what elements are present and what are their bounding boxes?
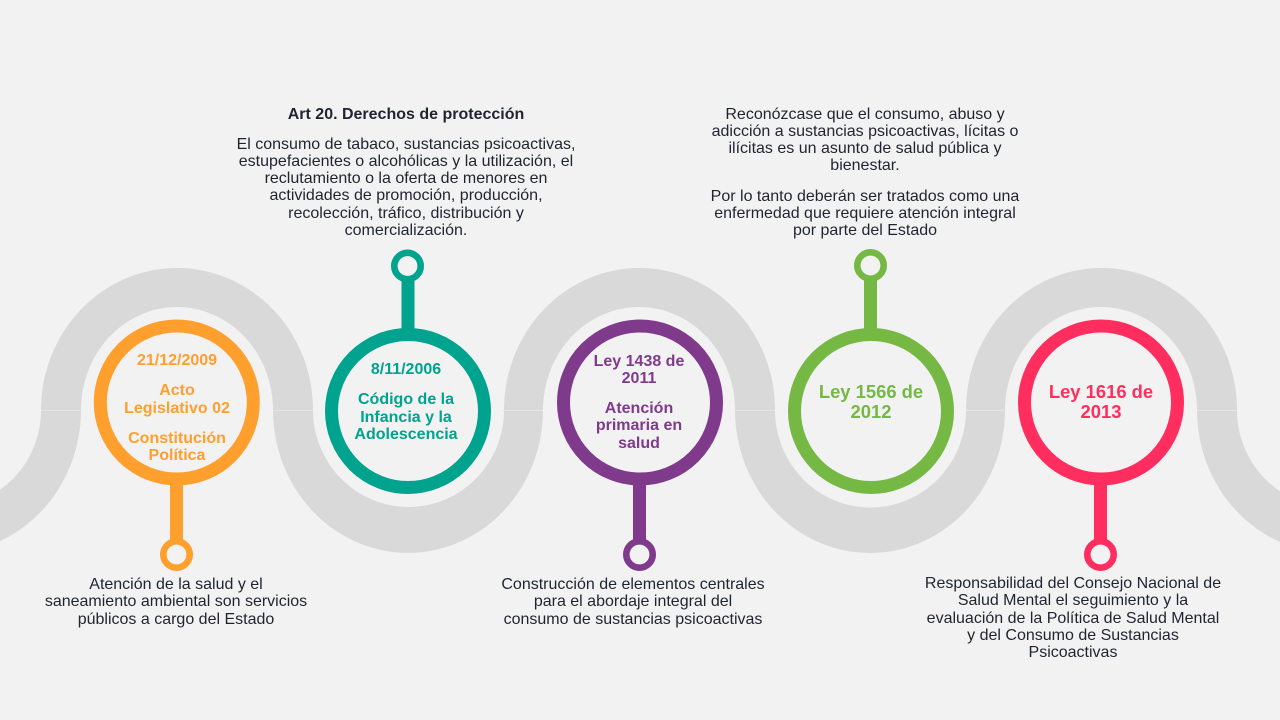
marker: pink circle with stem and ring [1024,326,1178,568]
label: Ley 1438 de 2011: salud [618,435,660,452]
text: Art 20 description: reclutamiento o la oferta de menores en [265,170,547,187]
marker: green circle with stem and ring [794,252,948,488]
text: Ley 1566 description: adicción a sustancias psicoactivas, lícitas o [712,123,1018,140]
text: Ley 1616 description: Salud Mental el seguimiento y la [958,592,1188,609]
text: Ley 1616 description: y del Consumo de Sustancias [967,627,1179,644]
label: Ley 1616 de 2013 [1049,381,1153,422]
text: Ley 1438 description: Construcción de elementos centrales [501,576,765,593]
label: Código de la Infancia: Infancia y la [360,409,452,426]
text: Ley 1438 description [501,576,765,628]
label: Ley 1438 de 2011: 2011 Atención [605,370,673,417]
text: Art 20 description [237,136,575,239]
text: Acto Legislativo description: saneamiento ambiental son servicios [45,593,307,610]
label: Ley 1438 de 2011: primaria en [596,417,682,434]
marker: purple circle with stem and ring [564,326,716,568]
text: Art 20 description: El consumo de tabaco, sustancias psicoactivas, [237,136,575,152]
text: Acto Legislativo description: públicos a cargo del Estado [78,611,274,628]
text: Art 20 description: recolección, tráfico, distribución y [288,205,524,222]
text: Ley 1566 description: ilícitas es un asunto de salud pública y [728,140,1002,157]
marker: orange circle with stem and ring [100,326,253,568]
label: Ley 1438 de 2011 [594,352,684,452]
label: Ley 1616 de 2013: 2013 [1081,401,1121,422]
label: Acto Legislativo 02: Legislativo 02 Constitución [124,400,230,447]
text: Ley 1616 description: Psicoactivas [1029,644,1117,661]
text: Art 20 description: estupefacientes o alcohólicas y la utilización, el [239,153,573,170]
label: Ley 1566 de 2012: 2012 [851,401,891,422]
text: Ley 1616 description: Responsabilidad del Consejo Nacional de [925,575,1221,592]
text: Art 20 description: actividades de promoción, producción, [269,187,543,204]
text: Ley 1438 description: para el abordaje integral del [534,593,732,610]
text: Ley 1566 description: bienestar. Por lo tanto deberán ser tratados como una [711,157,1019,205]
text: Ley 1566 description: por parte del Estado [793,222,937,239]
text: Ley 1616 description: evaluación de la Política de Salud Mental [927,610,1219,627]
label: Acto Legislativo 02: 21/12/2009 Acto [137,352,217,399]
label: Acto Legislativo 02: Política [149,447,205,464]
text: Ley 1566 description [711,106,1020,239]
heading: Art 20: Art 20. Derechos de protección [288,106,524,122]
label: Ley 1566 de 2012: Ley 1566 de [819,381,923,402]
text: Ley 1566 description: Reconózcase que el consumo, abuso y [725,106,1005,122]
label: Acto Legislativo 02 [124,352,230,464]
text: Acto Legislativo description: Atención de la salud y el [89,576,263,593]
label: Código de la Infancia: 8/11/2006 Código de la [358,361,454,408]
label: Ley 1566 de 2012 [819,381,923,422]
text: Art 20 description: comercialización. [345,222,467,239]
label: Ley 1438 de 2011: Ley 1438 de [594,352,684,370]
text: Ley 1438 description: consumo de sustancias psicoactivas [504,611,762,628]
label: Código de la Infancia [354,361,458,443]
text: Acto Legislativo description [45,576,307,628]
label: Código de la Infancia: Adolescencia [354,426,458,443]
text: Ley 1566 description: enfermedad que requiere atención integral [714,205,1016,222]
text: Ley 1616 description [925,575,1221,661]
label: Ley 1616 de 2013: Ley 1616 de [1049,381,1153,402]
marker: teal circle with stem and ring [332,253,484,488]
